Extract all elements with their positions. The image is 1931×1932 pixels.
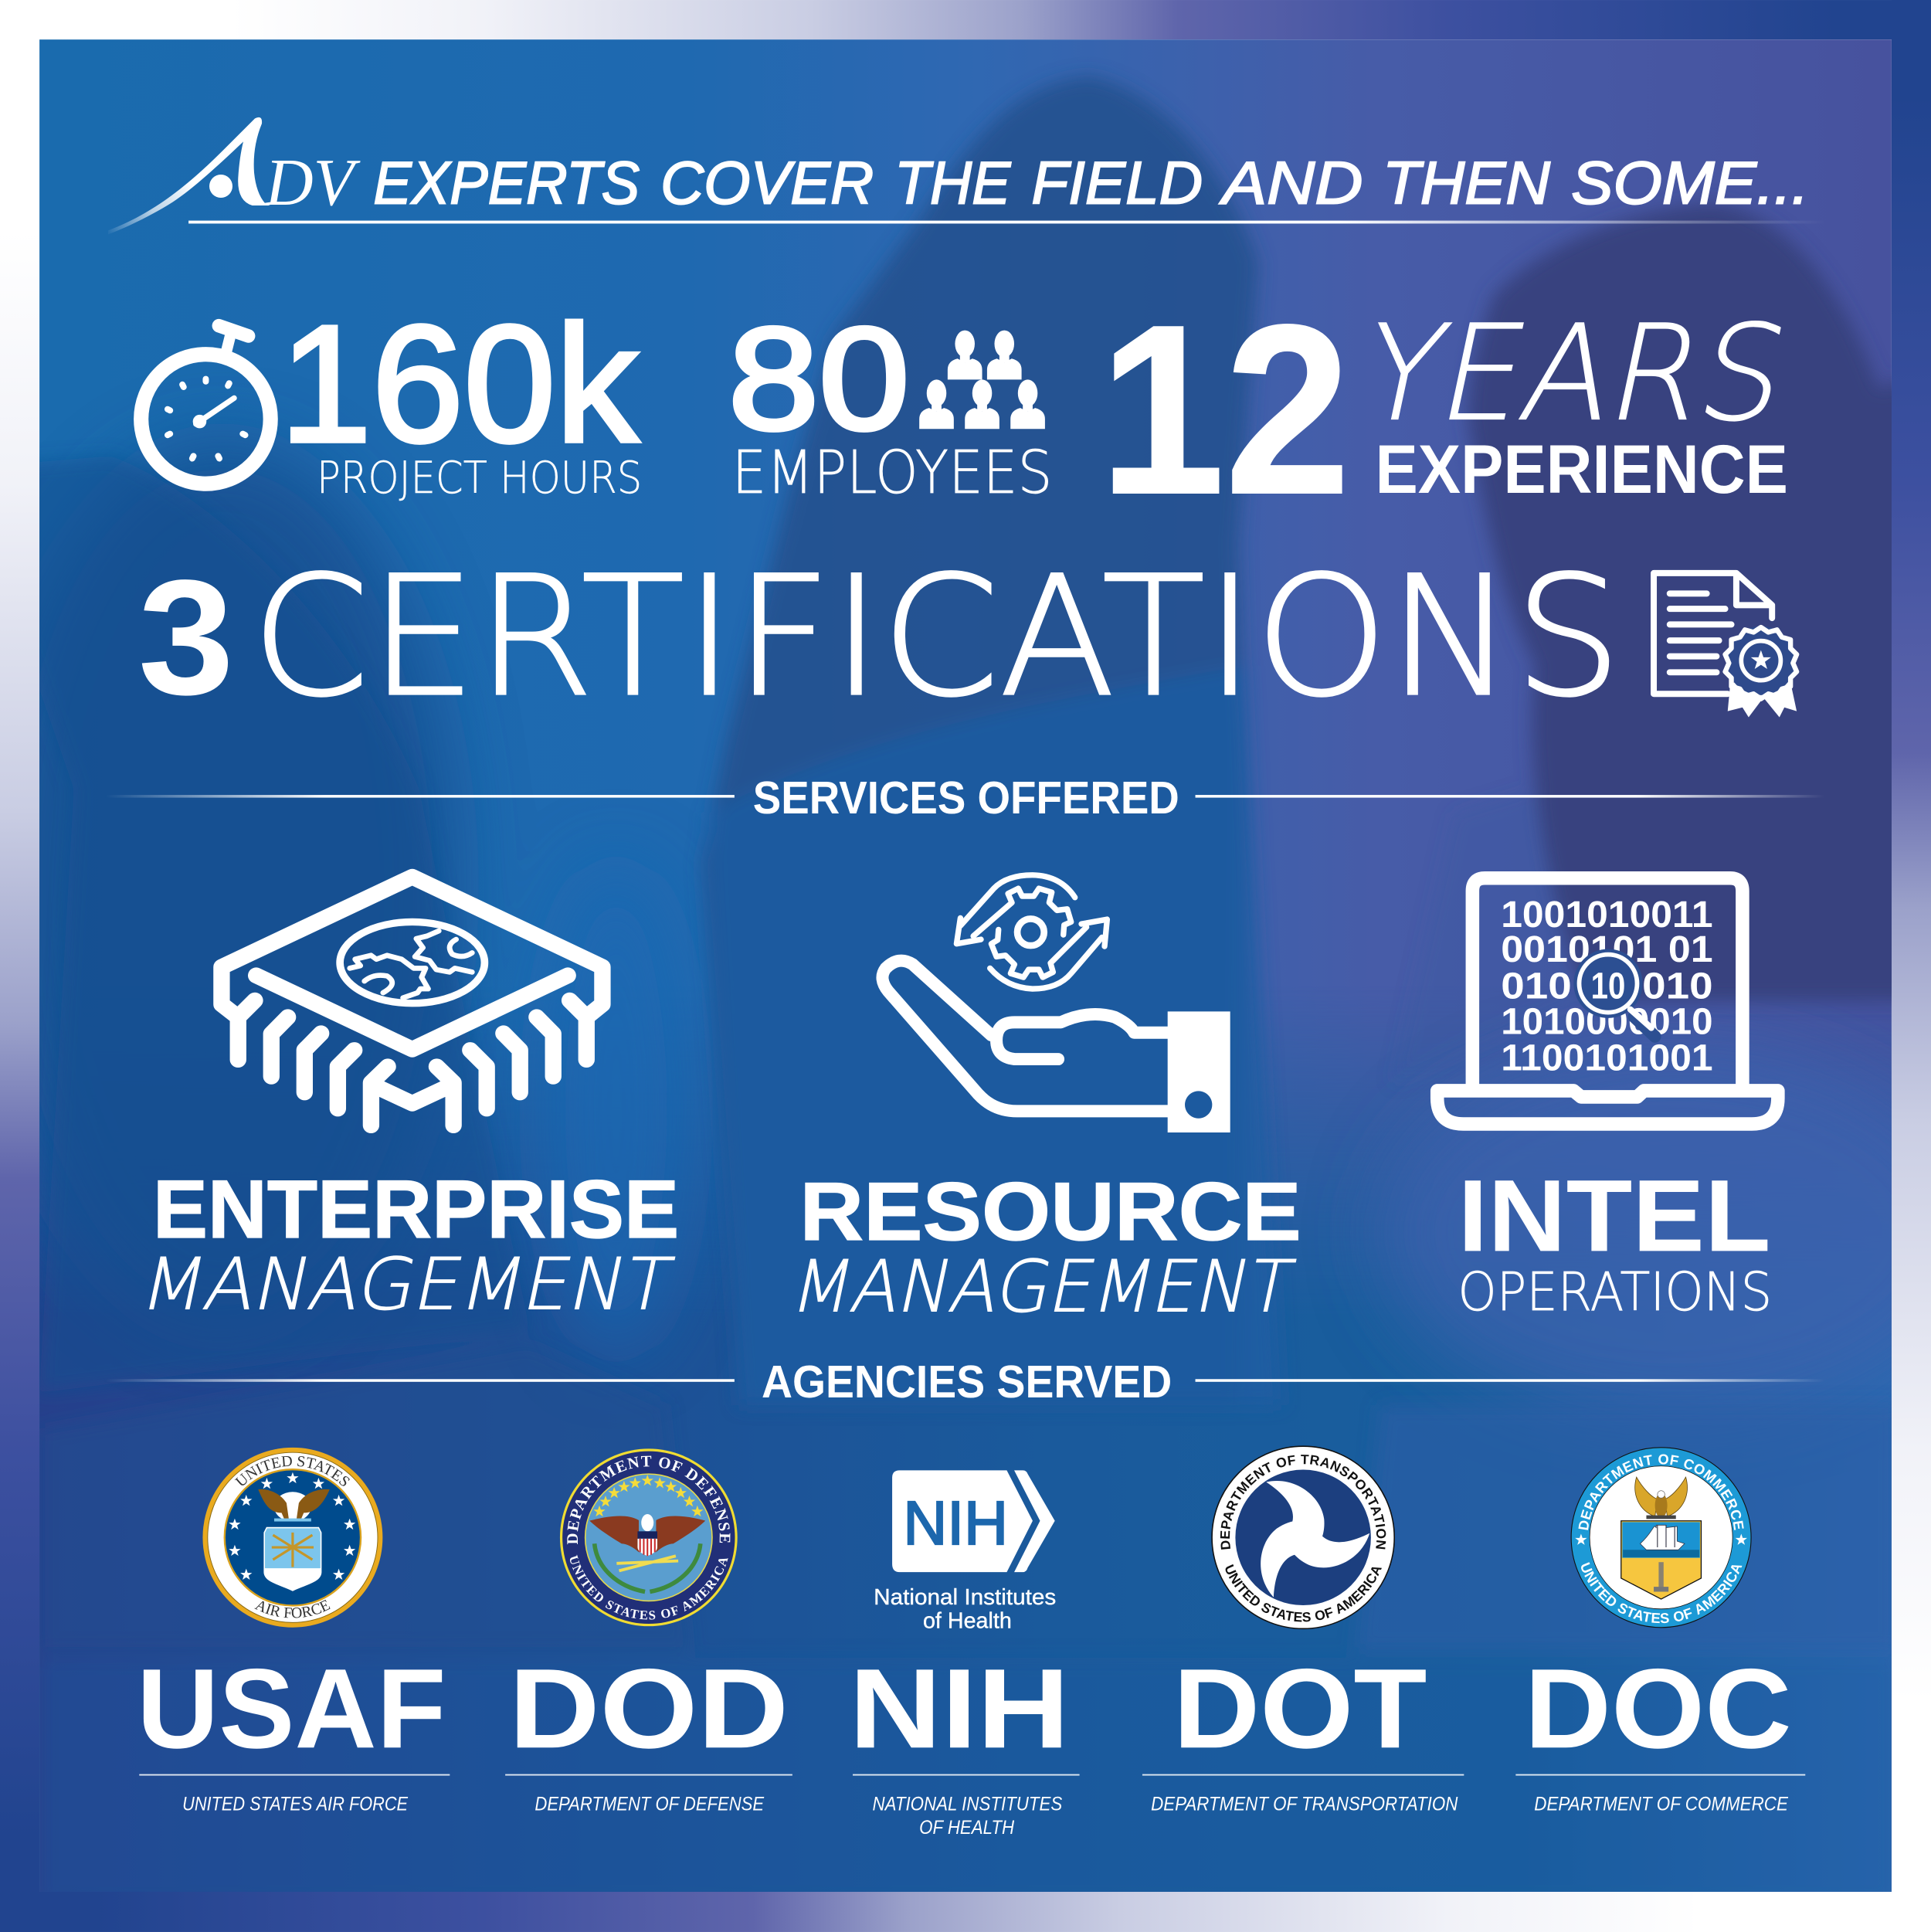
service: resource management: MANAGEMENT (785, 1245, 1301, 1329)
icon: intel laptop with binary (1437, 878, 1778, 1124)
logo: ADV swoosh: DV (264, 144, 361, 219)
stat: 12 years experience (1099, 275, 1800, 545)
seal: department of commerce: UNITED STATES OF AMERICA (1581, 1562, 1743, 1624)
stat: 12 years experience: EXPERIENCE (1375, 430, 1788, 508)
seal: department of transportation: UNITED STATES OF AMERICA (1225, 1564, 1382, 1622)
logo: NIH: National Institutes (874, 1585, 1056, 1610)
title: AND (1219, 148, 1363, 216)
seal: department of commerce: DEPARTMENT OF COMMERCE (1579, 1454, 1744, 1530)
title: THE (894, 148, 1011, 216)
title: FIELD (1031, 148, 1203, 216)
seal: department of defense: DEPARTMENT OF DEFENSE (567, 1455, 731, 1545)
logo: NIH: of Health (923, 1609, 1012, 1634)
stat: 3 certifications: CERTIFICATIONS (251, 542, 1622, 733)
agency: DOT (1142, 1645, 1464, 1815)
seal: department of commerce (1571, 1447, 1752, 1628)
agency: NIH: OF HEALTH (919, 1818, 1014, 1839)
magnifier: 10 (1591, 966, 1625, 1007)
heading: agencies served: AGENCIES SERVED (762, 1356, 1172, 1407)
icon: enterprise chip (222, 877, 602, 1126)
title (373, 148, 1809, 216)
binary rows: 1100101001 (1501, 1038, 1713, 1079)
icon: employees group (919, 331, 1045, 429)
heading: services offered: SERVICES OFFERED (753, 772, 1179, 823)
binary rows: 1010000010 (1501, 1002, 1713, 1043)
binary rows: 0010101 01 (1501, 929, 1713, 970)
binary rows: 010 00 010 (1501, 966, 1713, 1007)
stat: 12 years experience: 12 (1099, 275, 1351, 545)
service: enterprise management: MANAGEMENT (134, 1243, 680, 1326)
service: intel operations: INTEL (1458, 1159, 1771, 1273)
binary rows (1501, 895, 1713, 1079)
title: EXPERTS (373, 148, 640, 216)
title: THEN (1383, 148, 1551, 216)
title: SOME... (1571, 148, 1809, 216)
title underline (188, 221, 1827, 223)
icon: stopwatch (141, 326, 270, 484)
agency: NIH (849, 1645, 1080, 1839)
seal: air force: AIR FORCE (254, 1599, 331, 1618)
seal: department of defense: UNITED STATES OF AMERICA (570, 1554, 728, 1620)
agency: DOD (505, 1645, 792, 1815)
title: COVER (660, 148, 874, 216)
service: intel operations (1458, 1159, 1772, 1323)
agency: NIH: NIH (849, 1645, 1070, 1772)
seal: air force (202, 1448, 383, 1628)
agency: DOT: DOT (1173, 1645, 1427, 1772)
logo: NIH: NIH (903, 1489, 1008, 1557)
seal: department of defense (559, 1448, 738, 1627)
stat: 80 employees (728, 297, 1052, 508)
agency: DOD: DOD (509, 1645, 789, 1772)
service: enterprise management: ENTERPRISE (153, 1163, 679, 1255)
logo: ADV swoosh (108, 117, 361, 234)
icon: resource hand and gear (882, 875, 1230, 1132)
stat: 12 years experience: YEARS (1349, 297, 1800, 450)
agency: DOC: DEPARTMENT OF COMMERCE (1534, 1794, 1788, 1815)
service: intel operations: OPERATIONS (1458, 1261, 1772, 1323)
seal: department of transportation: DEPARTMENT OF TRANSPORTATION (1220, 1455, 1386, 1550)
stat: 80 employees: 80 (728, 297, 909, 460)
stat: 3 certifications: 3 (138, 545, 234, 728)
service: resource management: RESOURCE (799, 1165, 1301, 1258)
agency: NIH: NATIONAL INSTITUTES (873, 1794, 1063, 1815)
service: resource management (785, 1165, 1301, 1329)
agency: DOC: DOC (1525, 1645, 1792, 1772)
service: enterprise management (134, 1163, 680, 1326)
logo: NIH (874, 1470, 1056, 1634)
heading: agencies served (105, 1356, 1825, 1407)
seal: department of transportation (1211, 1445, 1395, 1630)
agency: DOD: DEPARTMENT OF DEFENSE (535, 1794, 765, 1815)
seal: air force: UNITED STATES (235, 1456, 350, 1486)
agency: DOC (1515, 1645, 1805, 1815)
icon: certificate (1654, 573, 1797, 718)
agency: USAF: USAF (137, 1645, 446, 1772)
heading: services offered (105, 772, 1825, 823)
agency: USAF: UNITED STATES AIR FORCE (182, 1794, 409, 1815)
binary rows: 1001010011 (1501, 895, 1713, 935)
agency: DOT: DEPARTMENT OF TRANSPORTATION (1151, 1794, 1458, 1815)
stat: 80 employees: EMPLOYEES (732, 439, 1052, 508)
stat: 160k project hours: PROJECT HOURS (317, 453, 642, 504)
stat: 160k project hours: 160k (280, 290, 639, 477)
magnifier (1573, 949, 1655, 1037)
